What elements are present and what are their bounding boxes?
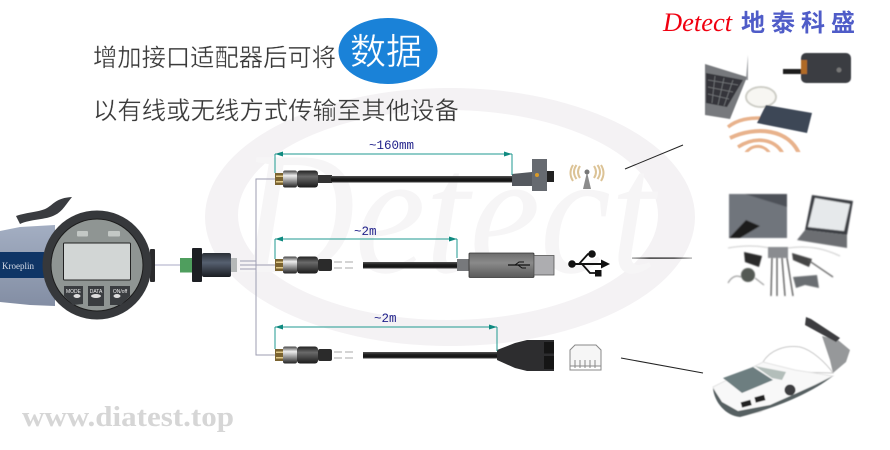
cable 3: printer xyxy=(275,340,554,371)
icon: printer port xyxy=(570,345,601,370)
dimension: ~160mm xyxy=(275,139,512,175)
icon: wireless tower xyxy=(570,165,604,189)
leader lines xyxy=(621,145,703,373)
dimension: ~2m (printer) xyxy=(275,312,497,351)
brand logo: Detect xyxy=(662,7,733,37)
watermark: Detect ellipse logo: Detect xyxy=(238,116,659,310)
caliper gauge: Kroeplin xyxy=(2,261,34,271)
caliper gauge: MODE xyxy=(66,289,82,295)
cable 1: wireless xyxy=(275,159,554,191)
dimension: ~160mm: ~160mm xyxy=(369,139,414,153)
highlight bubble: 数据 xyxy=(338,18,438,84)
branch lines xyxy=(240,179,275,355)
caliper gauge: ON/off xyxy=(113,289,128,295)
highlight bubble: 数据: 数据 xyxy=(350,31,422,72)
heading line 1: 增加接口适配器后可将 xyxy=(93,45,336,72)
dimension: ~2m (USB): ~2m xyxy=(354,225,377,239)
adapter connector xyxy=(155,248,237,282)
heading line 2: 以有线或无线方式传输至其他设备 xyxy=(93,98,459,125)
brand logo xyxy=(662,7,861,37)
cable 2: USB xyxy=(275,253,554,278)
dimension: ~2m (USB) xyxy=(275,225,457,259)
footer watermark URL: www.diatest.top xyxy=(22,402,234,433)
caliper gauge xyxy=(0,197,155,320)
caliper gauge: DATA xyxy=(90,289,103,295)
photo: multiplexer and measuring tools xyxy=(728,194,853,296)
brand logo: 地泰科盛 xyxy=(741,10,861,37)
dimension: ~2m (printer): ~2m xyxy=(374,312,397,326)
photo: wireless receiver and laptop xyxy=(705,53,851,156)
photo: portable printer xyxy=(713,317,850,417)
icon: USB symbol xyxy=(568,250,610,276)
